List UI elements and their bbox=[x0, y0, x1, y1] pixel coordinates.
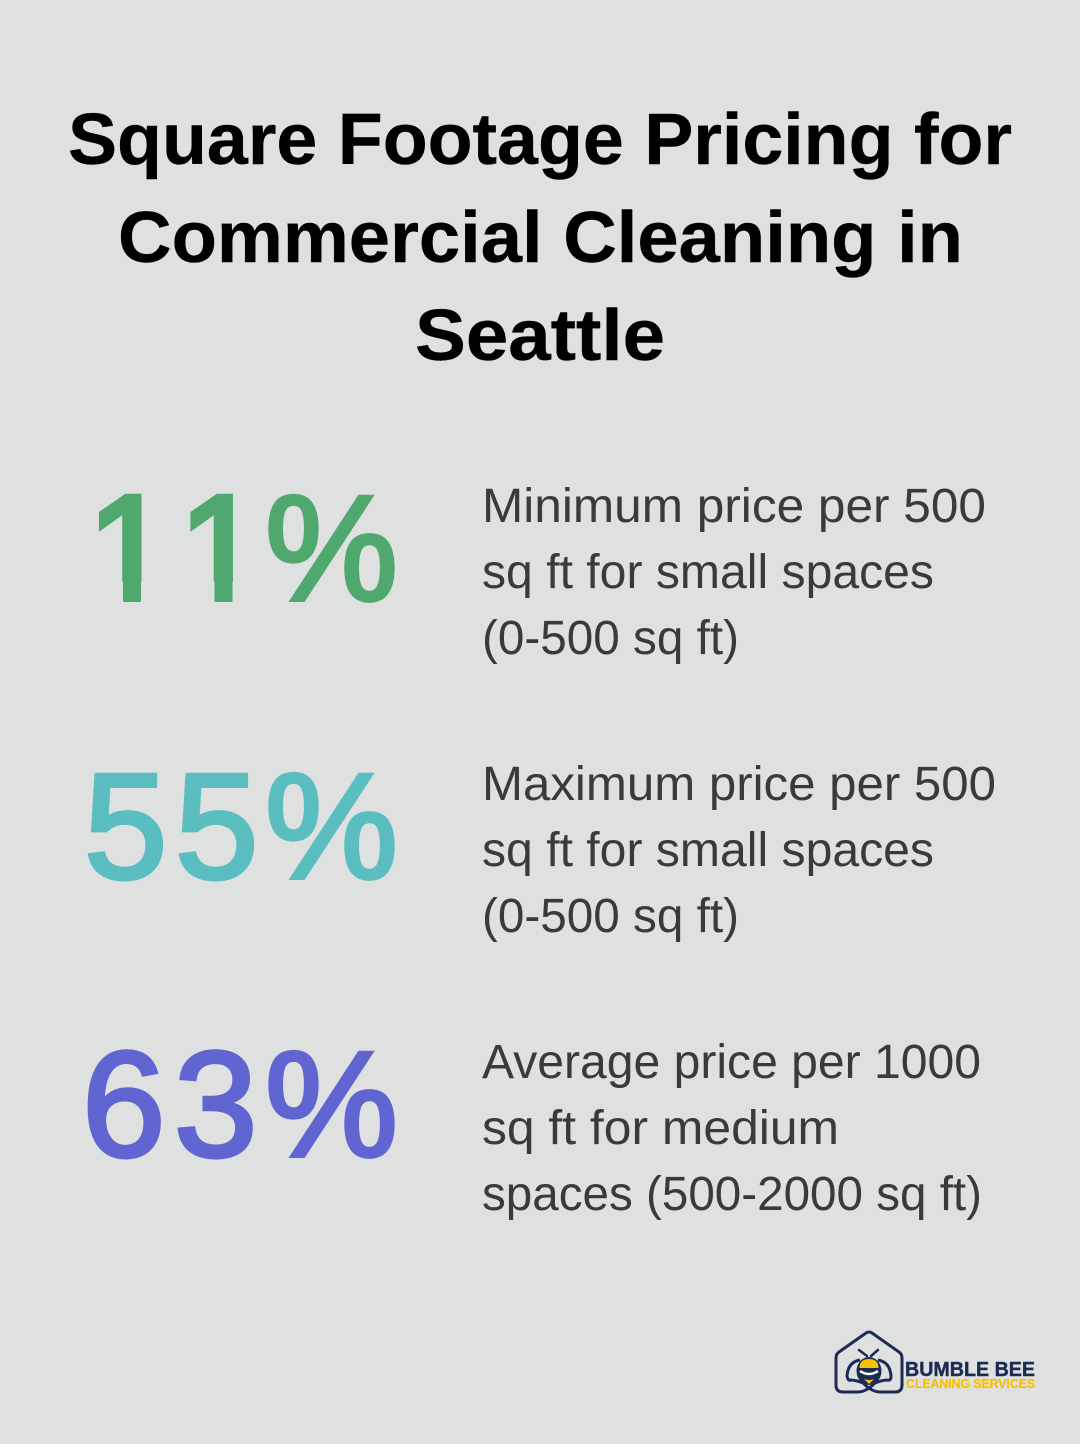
stat description: maximum price: sq ft for small spaces bbox=[482, 824, 934, 877]
stat number: 11%: % bbox=[265, 464, 398, 632]
stat number: 11%: 1 bbox=[88, 464, 171, 632]
stat number: 11% bbox=[98, 494, 395, 603]
stat description: minimum price bbox=[482, 480, 986, 665]
stat row: 63% bbox=[82, 1020, 982, 1221]
stat row: 55% bbox=[84, 742, 996, 943]
stat number: 63%: 3 bbox=[174, 1020, 257, 1188]
stat row: 11% bbox=[98, 487, 984, 664]
stat description: average price bbox=[482, 1036, 982, 1221]
stat description: maximum price: (0-500 sq ft) bbox=[482, 890, 739, 943]
stat description: minimum price: Minimum price per 500 bbox=[482, 480, 986, 533]
stat number: 11%: 1 bbox=[179, 464, 262, 632]
logo: Bumble Bee Cleaning Services bbox=[836, 1332, 1035, 1392]
stat description: minimum price: sq ft for small spaces bbox=[482, 546, 934, 599]
stat number: 63%: % bbox=[265, 1020, 398, 1188]
stat description: average price: sq ft for medium bbox=[482, 1102, 839, 1155]
stat description: minimum price: (0-500 sq ft) bbox=[482, 612, 739, 665]
logo wordmark: CLEANING SERVICES bbox=[906, 1377, 1035, 1391]
stat number: 55% bbox=[84, 742, 398, 910]
stat number: 55%: 5 bbox=[175, 742, 258, 910]
stat number: 63% bbox=[82, 1020, 398, 1188]
stat description: maximum price bbox=[482, 758, 996, 943]
stat description: average price: spaces (500-2000 sq ft) bbox=[482, 1168, 982, 1221]
logo wordmark bbox=[905, 1359, 1035, 1391]
stat number: 55%: 5 bbox=[84, 742, 167, 910]
stat number: 55%: % bbox=[265, 742, 398, 910]
icon: house with bee bbox=[836, 1332, 902, 1392]
title: Seattle bbox=[415, 296, 665, 376]
stat number: 63%: 6 bbox=[82, 1020, 165, 1188]
logo wordmark: BUMBLE BEE bbox=[905, 1359, 1035, 1381]
title: Commercial Cleaning in bbox=[118, 198, 963, 278]
title bbox=[68, 100, 1012, 376]
stat description: average price: Average price per 1000 bbox=[482, 1036, 981, 1089]
title: Square Footage Pricing for bbox=[68, 100, 1012, 180]
stat description: maximum price: Maximum price per 500 bbox=[482, 758, 996, 811]
